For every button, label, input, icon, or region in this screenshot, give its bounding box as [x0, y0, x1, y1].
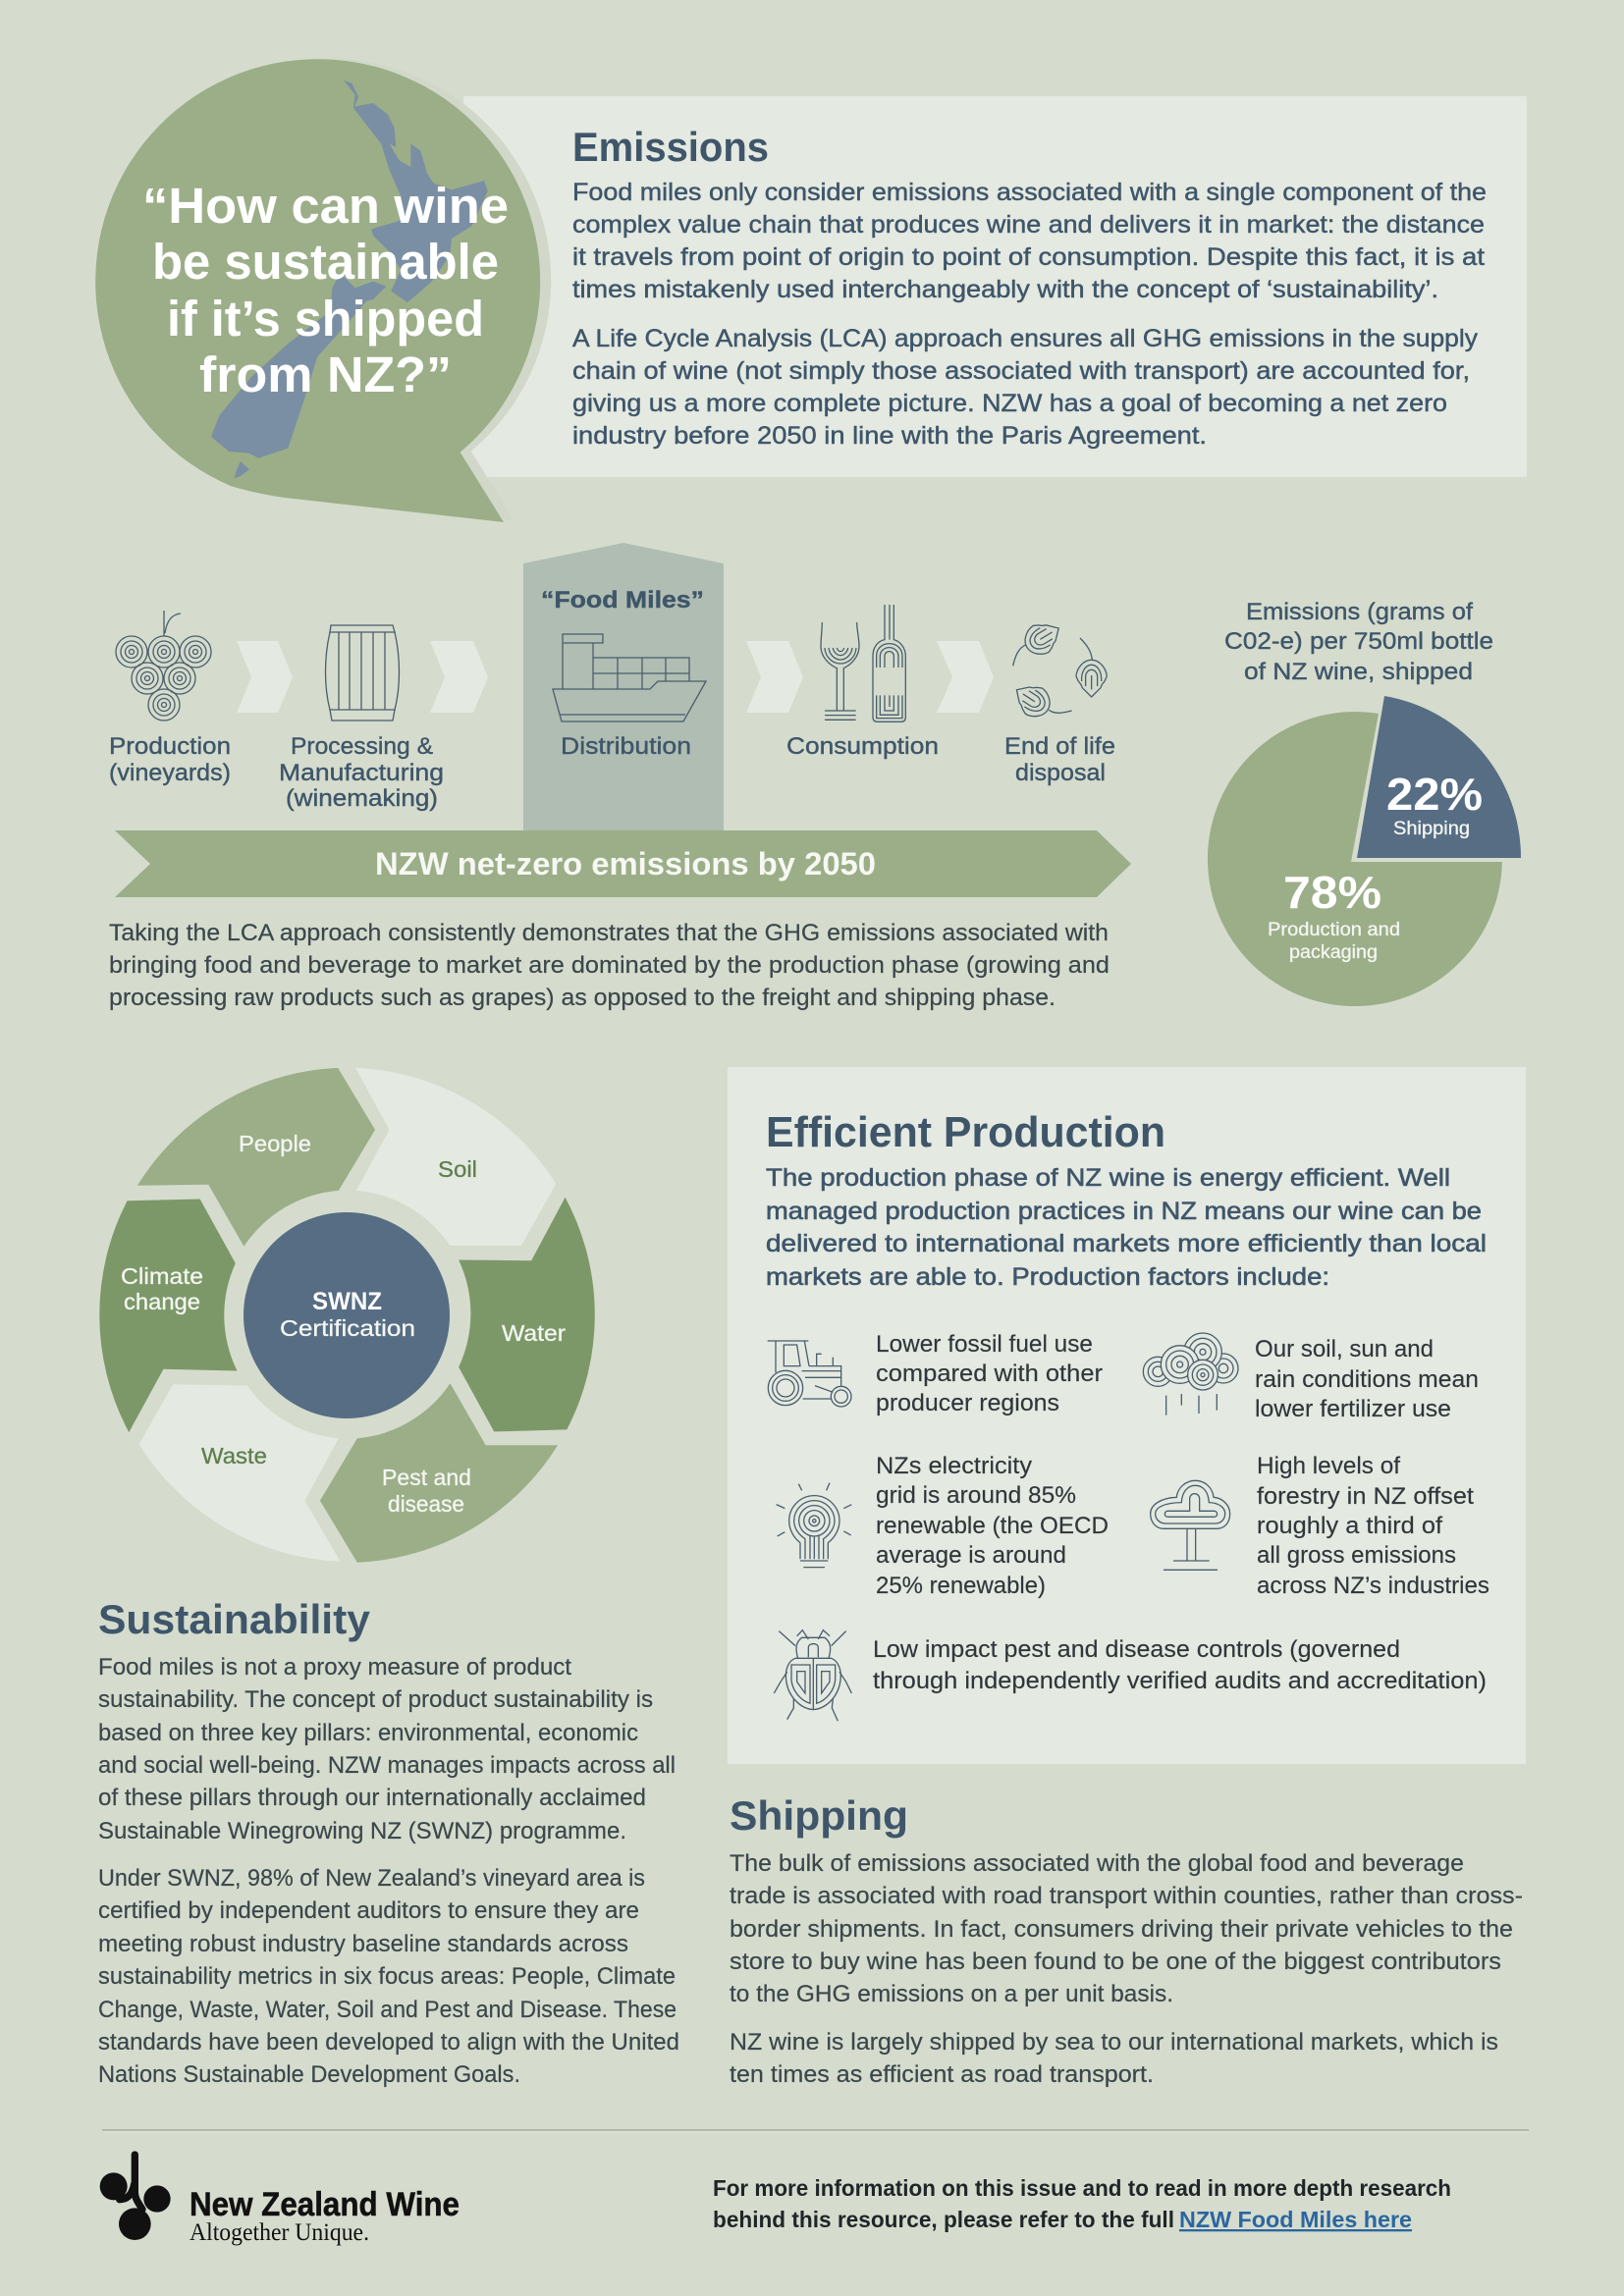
stage: production: [109, 611, 231, 786]
label: distribution: Distribution: [561, 733, 691, 760]
emissions text block: A Life Cycle Analysis (LCA) approach ensures all GHG emissions in the supply: [572, 325, 1479, 352]
efficient production intro: delivered to international markets more efficiently than local: [766, 1230, 1487, 1257]
shipping text: NZ wine is largely shipped by sea to our international markets, which is: [730, 2029, 1498, 2056]
sustainability text: sustainability. The concept of product sustainability is: [98, 1686, 653, 1713]
factor text: compared with other: [876, 1361, 1103, 1387]
sustainability text: Change, Waste, Water, Soil and Pest and Disease. These: [98, 1997, 677, 2023]
pie chart: emissions per bottle: [1208, 599, 1521, 1006]
sustainability text: [98, 1654, 679, 2088]
text block: LCA summary: processing raw products such as grapes) as opposed to the freight and shipping phase.: [109, 985, 1056, 1011]
sustainability text: Under SWNZ, 98% of New Zealand’s vineyard area is: [98, 1865, 645, 1892]
food miles label: “Food Miles”: [541, 587, 704, 614]
icon: barrel: [326, 625, 399, 721]
icon: container ship: [553, 634, 706, 721]
footer call to action: [713, 2175, 1451, 2232]
factor text: [1257, 1453, 1489, 1599]
wheel labels: SWNZ: [312, 1288, 382, 1315]
stage: distribution: [541, 587, 706, 760]
wheel labels: Water: [502, 1320, 566, 1346]
emissions text block: industry before 2050 in line with the Paris Agreement.: [572, 422, 1207, 450]
factor text: 25% renewable): [876, 1573, 1046, 1599]
sustainability text: and social well-being. NZW manages impacts across all: [98, 1752, 676, 1779]
panel: emissions: [463, 96, 1527, 477]
factor text: lower fertilizer use: [1255, 1396, 1451, 1422]
label: end of life: End of life: [1004, 733, 1115, 760]
label: production: Production: [109, 733, 231, 760]
wheel labels: People: [239, 1131, 311, 1156]
link: NZW Food Miles here: [1179, 2207, 1412, 2232]
sustainability text: meeting robust industry baseline standards across: [98, 1931, 628, 1957]
stage: processing: [279, 625, 444, 812]
food miles highlighted band: [523, 543, 724, 830]
value: 22% shipping: [1386, 769, 1483, 839]
factor text: [876, 1331, 1103, 1416]
factor: renewable electricity: [777, 1453, 1109, 1599]
factor text: NZs electricity: [876, 1453, 1032, 1479]
pie title: C02-e) per 750ml bottle: [1224, 628, 1493, 655]
quote: “How can wine: [142, 178, 509, 234]
sustainability text: certified by independent auditors to ensure they are: [98, 1897, 639, 1924]
quote: [142, 178, 509, 402]
shipping text: [730, 1850, 1523, 2088]
value: 78% production and packaging: 78%: [1283, 867, 1381, 918]
pie title: [1224, 599, 1493, 685]
sustainability text: sustainability metrics in six focus areas: People, Climate: [98, 1963, 676, 1990]
wheel labels: disease: [388, 1491, 464, 1517]
section: sustainability: [98, 1596, 679, 2088]
factor text: roughly a third of: [1257, 1513, 1442, 1539]
segment: people: [137, 1068, 375, 1247]
shipping text: ten times as efficient as road transport.: [730, 2061, 1154, 2088]
icon: beetle: [774, 1630, 851, 1721]
speech bubble with NZ map and quote: [95, 58, 551, 522]
icon: tractor: [768, 1341, 851, 1407]
quote: if it’s shipped: [167, 291, 484, 347]
shipping heading: Shipping: [730, 1792, 908, 1839]
footer call to action: behind this resource, please refer to the full: [713, 2207, 1174, 2232]
icon: grape logo mark: [100, 2155, 171, 2240]
segment: climate change: [99, 1200, 238, 1432]
value: 78% production and packaging: packaging: [1289, 942, 1378, 963]
emissions text block: complex value chain that produces wine and delivers it in market: the distance: [572, 211, 1485, 239]
sustainability heading: Sustainability: [98, 1596, 371, 1642]
factor text: [873, 1636, 1487, 1694]
sustainability text: Sustainable Winegrowing NZ (SWNZ) programme.: [98, 1818, 626, 1844]
factor text: Our soil, sun and: [1255, 1336, 1434, 1362]
emissions heading: Emissions: [572, 124, 769, 170]
slice: production and packaging: [1208, 712, 1502, 1006]
label: processing: (winemaking): [286, 785, 438, 812]
factor text: Low impact pest and disease controls (governed: [873, 1636, 1400, 1663]
logo: New Zealand Wine: [100, 2155, 460, 2246]
text block: LCA summary: Taking the LCA approach consistently demonstrates that the GHG emissions associated with: [109, 920, 1109, 946]
label: production: [109, 733, 231, 786]
panel: efficient production: [728, 1067, 1526, 1764]
slice: shipping: [1357, 696, 1521, 858]
factor text: Lower fossil fuel use: [876, 1331, 1093, 1358]
factor: soil, sun and rain: [1143, 1333, 1479, 1422]
text block: LCA summary: [109, 920, 1110, 1011]
icon: rain cloud: [1143, 1333, 1238, 1415]
shipping text: store to buy wine has been found to be one of the biggest contributors: [730, 1949, 1501, 1975]
icon: wine glass and bottle: [821, 605, 905, 721]
sustainability text: of these pillars through our internationally acclaimed: [98, 1785, 646, 1811]
label: end of life: disposal: [1015, 760, 1106, 786]
shipping text: trade is associated with road transport within counties, rather than cross-: [730, 1883, 1523, 1909]
factor text: grid is around 85%: [876, 1482, 1076, 1509]
factor text: renewable (the OECD: [876, 1513, 1109, 1539]
value: 22% shipping: Shipping: [1393, 819, 1470, 839]
map: New Zealand: [211, 80, 488, 478]
label: processing: [279, 733, 444, 812]
wheel diagram: SWNZ focus areas: [99, 1068, 595, 1563]
pie title: Emissions (grams of: [1246, 599, 1473, 625]
section: shipping: [730, 1792, 1523, 2088]
value: 78% production and packaging: Production and: [1268, 920, 1400, 940]
pie title: of NZ wine, shipped: [1244, 659, 1473, 685]
wordmark: New Zealand Wine: [189, 2186, 460, 2223]
text block: LCA summary: bringing food and beverage to market are dominated by the production phase (growing and: [109, 952, 1110, 979]
wheel labels: Pest and: [382, 1465, 471, 1490]
sustainability text: standards have been developed to align with the United: [98, 2029, 679, 2056]
wheel labels: Waste: [201, 1443, 267, 1468]
label: processing: Processing &: [291, 733, 433, 760]
factor text: average is around: [876, 1542, 1066, 1569]
segment: pest and disease: [320, 1383, 558, 1563]
tagline: Altogether Unique.: [189, 2219, 369, 2246]
shipping text: to the GHG emissions on a per unit basis.: [730, 1981, 1173, 2007]
centre circle: [244, 1212, 450, 1418]
factor text: High levels of: [1257, 1453, 1400, 1479]
emissions text block: [572, 179, 1487, 450]
factor: pest control: [774, 1630, 1487, 1721]
factor text: across NZ’s industries: [1257, 1573, 1489, 1599]
stage: end of life: [1004, 615, 1115, 786]
emissions text block: giving us a more complete picture. NZW has a goal of becoming a net zero: [572, 390, 1447, 417]
factor text: [1255, 1336, 1479, 1422]
factor text: all gross emissions: [1257, 1542, 1456, 1569]
arrow: net-zero banner: NZW net-zero emissions by 2050: [375, 846, 876, 881]
icon: leaves cycle: [1008, 615, 1107, 722]
label: production: (vineyards): [109, 760, 231, 786]
wheel labels: change: [124, 1289, 200, 1314]
icon: light bulb: [777, 1483, 851, 1568]
efficient production intro: [766, 1164, 1487, 1291]
label: end of life: [1004, 733, 1115, 786]
efficient production intro: markets are able to. Production factors include:: [766, 1263, 1329, 1291]
quote: from NZ?”: [199, 347, 452, 402]
wheel labels: Soil: [438, 1156, 477, 1182]
sustainability text: Food miles is not a proxy measure of product: [98, 1654, 571, 1681]
emissions text block: times mistakenly used interchangeably with the concept of ‘sustainability’.: [572, 276, 1438, 303]
segment: soil: [355, 1068, 556, 1246]
value: 78% production and packaging: [1268, 867, 1400, 963]
label: processing: Manufacturing: [279, 760, 444, 786]
efficient production heading: Efficient Production: [766, 1108, 1165, 1156]
value: 22% shipping: 22%: [1386, 769, 1483, 820]
stage: consumption: [786, 605, 939, 760]
shipping text: border shipments. In fact, consumers driving their private vehicles to the: [730, 1916, 1513, 1943]
efficient production intro: The production phase of NZ wine is energy efficient. Well: [766, 1164, 1450, 1192]
icon: grapes: [116, 611, 211, 721]
factor: fossil fuel: [768, 1331, 1103, 1416]
segment: water: [459, 1198, 595, 1431]
factor text: forestry in NZ offset: [1257, 1483, 1474, 1510]
factor text: [876, 1453, 1109, 1599]
segment: waste: [139, 1384, 341, 1562]
sustainability text: based on three key pillars: environmental, economic: [98, 1720, 638, 1746]
wheel labels: Climate: [121, 1263, 203, 1289]
icon: tree: [1151, 1480, 1230, 1570]
chevron arrows between stages: [237, 641, 994, 713]
shipping text: The bulk of emissions associated with the global food and beverage: [730, 1850, 1464, 1877]
factor text: through independently verified audits and accreditation): [873, 1668, 1487, 1694]
footer call to action: For more information on this issue and to read in more depth research: [713, 2175, 1451, 2201]
label: consumption: Consumption: [786, 733, 939, 760]
emissions text block: Food miles only consider emissions associated with a single component of the: [572, 179, 1487, 206]
factor text: producer regions: [876, 1390, 1059, 1416]
emissions text block: chain of wine (not simply those associated with transport) are accounted for,: [572, 357, 1470, 385]
factor: forestry: [1151, 1453, 1489, 1599]
sustainability text: Nations Sustainable Development Goals.: [98, 2061, 520, 2088]
wheel labels: [121, 1131, 566, 1517]
arrow: net-zero banner: [115, 830, 1131, 897]
emissions text block: it travels from point of origin to point of consumption. Despite this fact, it is at: [572, 243, 1485, 271]
quote: be sustainable: [152, 234, 499, 290]
wheel labels: Certification: [280, 1315, 415, 1341]
factor text: rain conditions mean: [1255, 1366, 1479, 1393]
efficient production intro: managed production practices in NZ means our wine can be: [766, 1198, 1482, 1225]
